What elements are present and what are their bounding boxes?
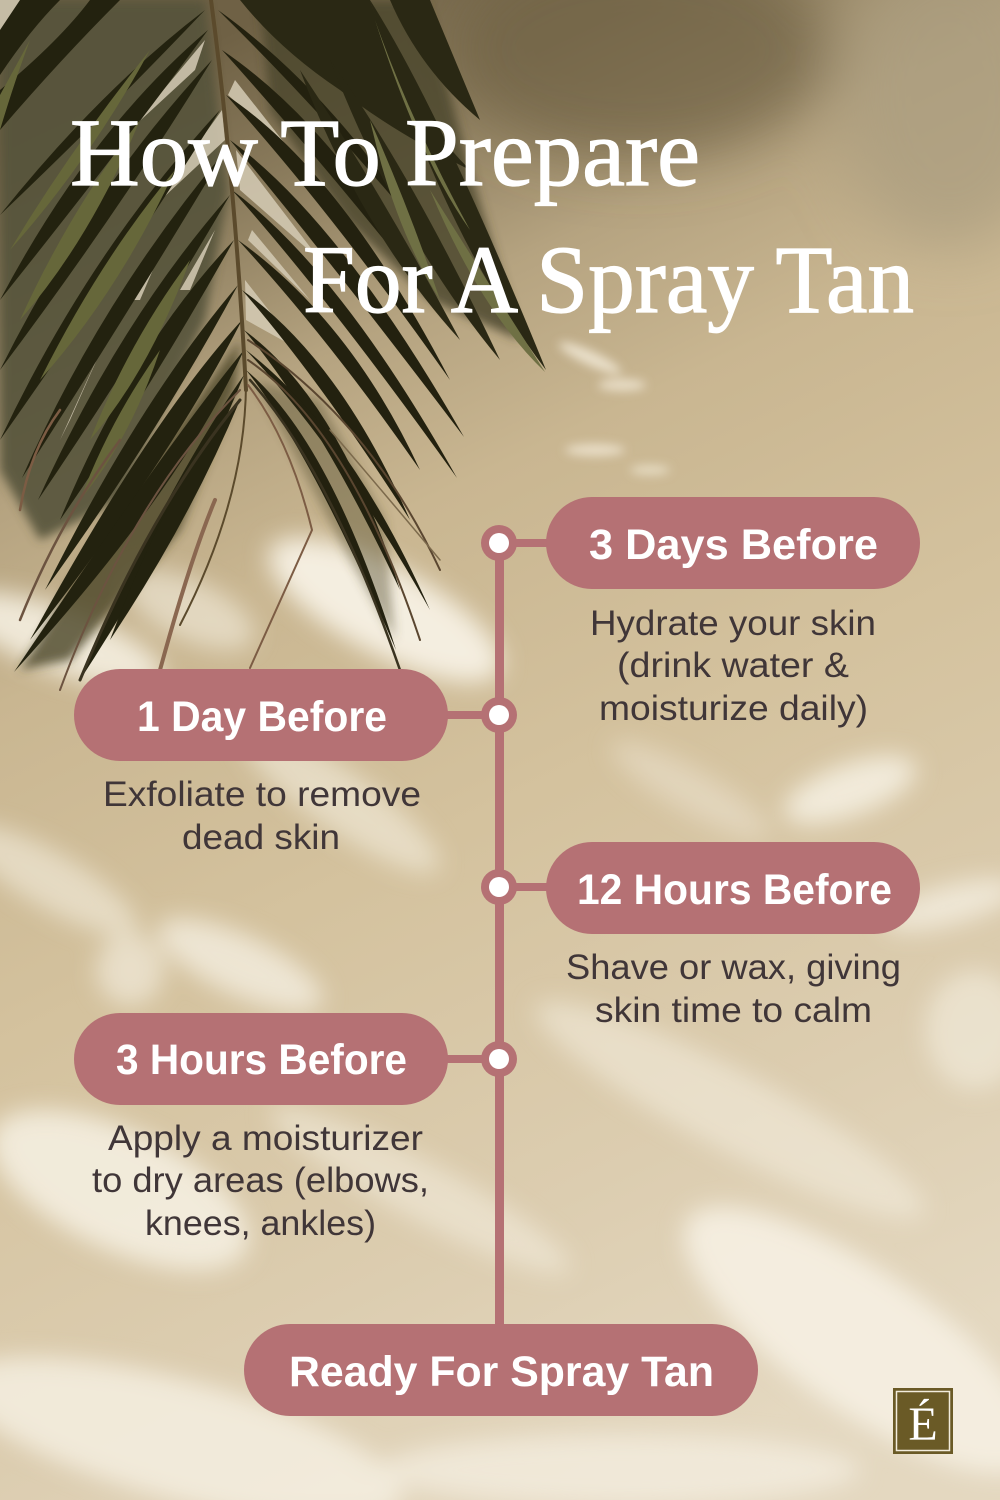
logo: É [908,1398,938,1451]
pill: 12 hours before [546,842,920,934]
description: moisturizer: Apply a moisturizer [108,1119,423,1158]
description: hydrate: Hydrate your skin [590,604,876,643]
pill: 3 hours before [74,1013,448,1105]
pill: ready for spray tan: Ready For Spray Tan [289,1348,714,1396]
description: shave: Shave or wax, giving [566,948,901,987]
description: moisturizer: knees, ankles) [145,1204,376,1243]
pill: 3 days before: 3 Days Before [589,521,878,569]
pill: 3 hours before: 3 Hours Before [116,1036,407,1084]
description: hydrate: moisturize daily) [599,689,868,728]
pill: ready for spray tan [244,1324,758,1416]
logo [893,1388,953,1454]
description: moisturizer [92,1119,429,1243]
description: moisturizer: to dry areas (elbows, [92,1161,429,1200]
description: exfoliate: dead skin [182,818,340,857]
description: shave: skin time to calm [595,991,872,1030]
olive leaflets [0,40,190,500]
pill: 3 days before [546,497,920,589]
midrib and thin brown leaflets [20,0,440,690]
upper right frond [240,0,546,370]
palm frond [0,0,546,690]
description: hydrate: (drink water & [617,646,849,685]
description: exfoliate: Exfoliate to remove [103,775,421,814]
light gaps between leaflets [0,0,320,440]
pill: 1 day before [74,669,448,761]
title line 2: For A Spray Tan [303,226,914,333]
step: 1 day before [74,669,448,857]
title [70,99,914,333]
description: exfoliate [103,775,421,857]
description: hydrate [590,604,876,728]
step: 3 days before [546,497,920,728]
description: shave [566,948,901,1030]
timeline [445,525,550,1333]
title line 1: How To Prepare [70,99,700,206]
dark leaf masses [0,0,520,670]
pill: 12 hours before: 12 Hours Before [577,866,892,914]
right leaflets [218,10,464,650]
step: 12 hours before [546,842,920,1030]
left leaflets [0,0,244,680]
step: 3 hours before [74,1013,448,1243]
pill: 1 day before: 1 Day Before [137,693,387,741]
